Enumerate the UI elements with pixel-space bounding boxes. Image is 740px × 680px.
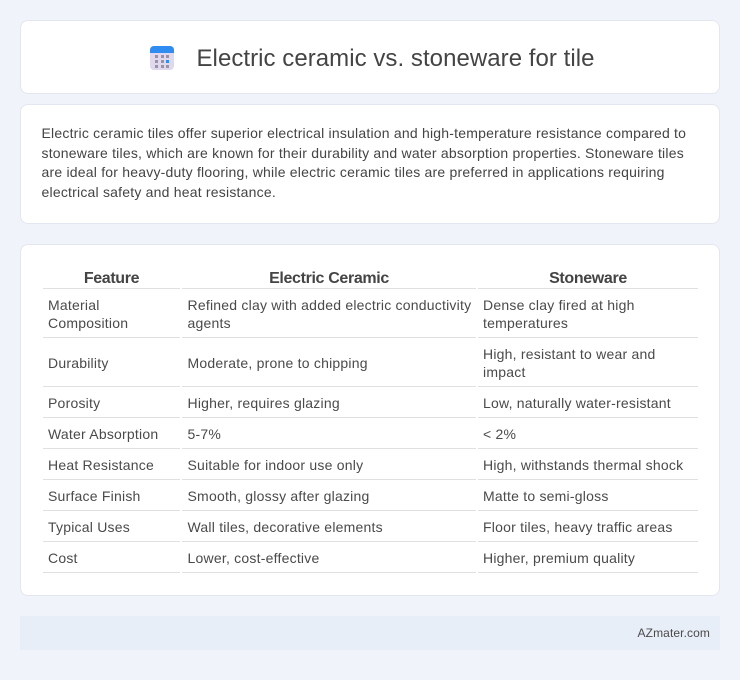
row: material composition: agents xyxy=(188,315,231,331)
table header xyxy=(43,270,698,289)
row: porosity: Low, naturally water-resistant xyxy=(483,395,671,411)
row: water absorption xyxy=(43,426,698,449)
title: Electric ceramic vs. stoneware for tile xyxy=(196,45,595,72)
row: water absorption: Water Absorption xyxy=(48,426,158,442)
row: surface finish: Matte to semi-gloss xyxy=(483,488,609,504)
row: typical uses: Typical Uses xyxy=(48,519,130,535)
row: cost: Lower, cost-effective xyxy=(188,550,319,566)
table header: Feature xyxy=(84,270,139,287)
row: cost xyxy=(43,550,698,573)
row: durability: Durability xyxy=(48,355,109,371)
comparison table xyxy=(43,270,698,573)
row: cost: Higher, premium quality xyxy=(483,550,635,566)
row: porosity xyxy=(43,395,698,418)
row: heat resistance: High, withstands thermal shock xyxy=(483,457,683,473)
row: surface finish: Smooth, glossy after glazing xyxy=(188,488,370,504)
summary text: stoneware tiles, which are known for their durability and water absorption properties. Stoneware tiles xyxy=(42,145,684,161)
panel: comparison table xyxy=(20,244,720,596)
row: typical uses: Wall tiles, decorative elements xyxy=(188,519,383,535)
row: porosity: Porosity xyxy=(48,395,100,411)
row: durability: impact xyxy=(483,364,526,380)
row: material composition: temperatures xyxy=(483,315,568,331)
row: durability: High, resistant to wear and xyxy=(483,346,655,362)
row: material composition: Refined clay with added electric conductivity xyxy=(188,297,471,313)
row: surface finish xyxy=(43,488,698,511)
row: water absorption: 5-7% xyxy=(188,426,221,442)
summary text: Electric ceramic tiles offer superior electrical insulation and high-temperature resistance compared to xyxy=(42,125,686,141)
footer bar xyxy=(20,616,720,650)
row: typical uses: Floor tiles, heavy traffic areas xyxy=(483,519,673,535)
row: cost: Cost xyxy=(48,550,78,566)
row: surface finish: Surface Finish xyxy=(48,488,141,504)
panel: title card xyxy=(20,20,720,94)
table header: Electric Ceramic xyxy=(269,270,389,287)
row: water absorption: < 2% xyxy=(483,426,516,442)
row: durability: Moderate, prone to chipping xyxy=(188,355,368,371)
summary text xyxy=(42,125,686,200)
row: typical uses xyxy=(43,519,698,542)
table header: Stoneware xyxy=(549,270,627,287)
row: material composition: Material xyxy=(48,297,100,313)
footer credit: AZmater.com xyxy=(638,626,710,640)
row: material composition: Composition xyxy=(48,315,128,331)
row: heat resistance xyxy=(43,457,698,480)
row: porosity: Higher, requires glazing xyxy=(188,395,340,411)
summary text: are ideal for heavy-duty flooring, while electric ceramic tiles are preferred in applications requiring xyxy=(42,164,665,180)
panel: summary xyxy=(20,104,720,224)
row: heat resistance: Heat Resistance xyxy=(48,457,154,473)
row: material composition xyxy=(43,297,698,338)
summary text: electrical safety and heat resistance. xyxy=(42,184,276,200)
row: material composition: Dense clay fired at high xyxy=(483,297,635,313)
row: heat resistance: Suitable for indoor use only xyxy=(188,457,363,473)
row: durability xyxy=(43,346,698,387)
icon: calendar xyxy=(150,46,174,70)
